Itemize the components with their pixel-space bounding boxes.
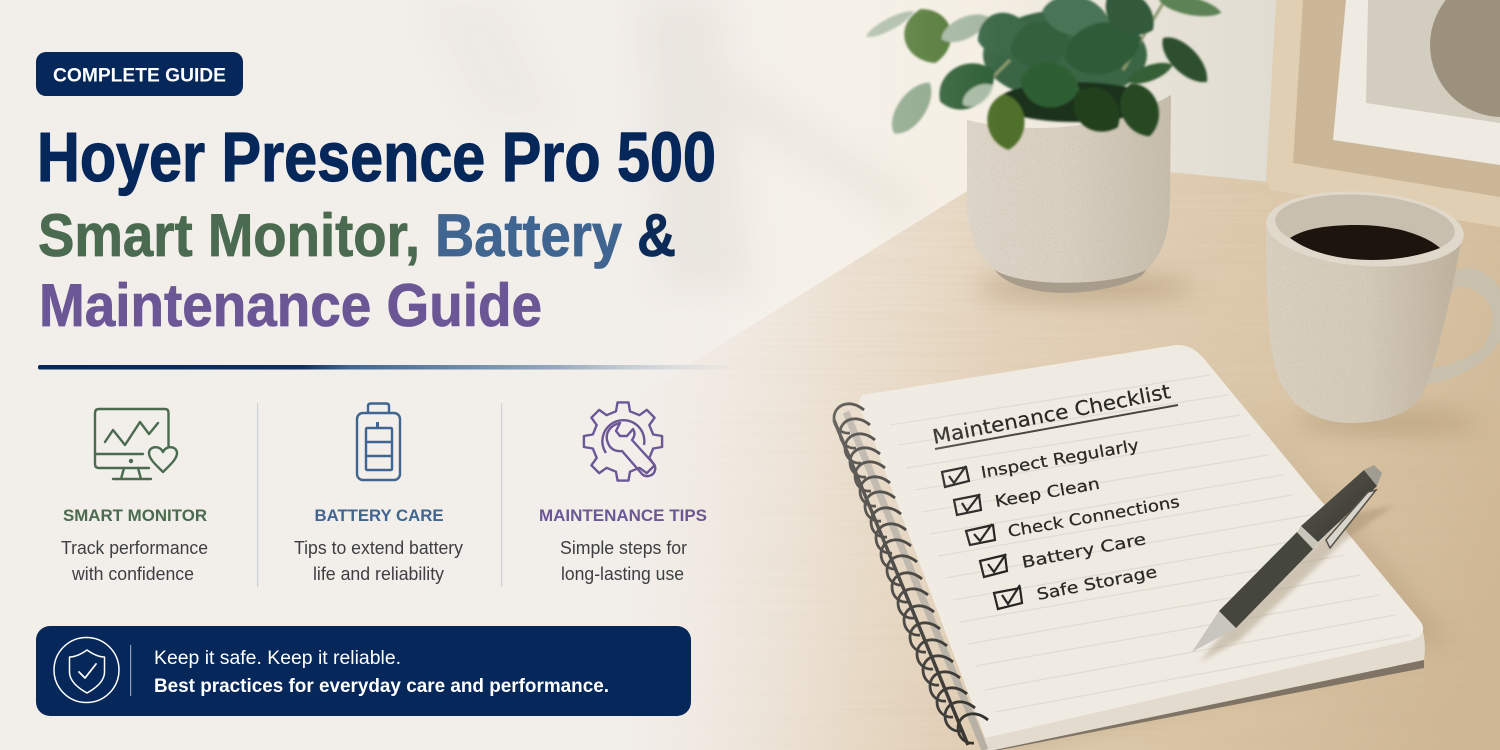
- title: Maintenance Guide: [39, 272, 542, 339]
- spiral binding: [834, 404, 988, 750]
- title: Battery: [435, 202, 623, 269]
- feature column: maintenance tips: [539, 402, 707, 584]
- icon: battery: [357, 404, 400, 480]
- feature column: smart monitor: Track performance: [61, 538, 208, 558]
- handwritten checklist: Check Connections: [1006, 492, 1181, 541]
- icon: gear with wrench: [584, 402, 662, 481]
- title: Smart Monitor,: [38, 202, 420, 269]
- feature column: smart monitor: with confidence: [71, 564, 194, 584]
- handwritten checklist: Battery Care: [1020, 529, 1147, 572]
- callout banner: Best practices for everyday care and performance.: [154, 676, 609, 697]
- coffee mug: [1262, 185, 1500, 425]
- shadows on desk: [975, 274, 1480, 750]
- feature column: battery care: [294, 404, 463, 584]
- feature column: smart monitor: SMART MONITOR: [63, 506, 207, 525]
- callout banner: [36, 626, 691, 716]
- handwritten checklist: Keep Clean: [993, 474, 1101, 511]
- handwritten checklist: [930, 379, 1181, 609]
- picture frame: [1266, 0, 1500, 227]
- icon: monitor with heart: [95, 409, 177, 479]
- handwritten checklist: Inspect Regularly: [979, 435, 1140, 482]
- badge: complete guide: COMPLETE GUIDE: [53, 66, 226, 86]
- feature column: battery care: BATTERY CARE: [314, 506, 444, 525]
- title: &: [637, 202, 676, 269]
- divider rule: [38, 365, 730, 370]
- plant pot: [967, 95, 1171, 293]
- column separator: [257, 403, 258, 587]
- title: Hoyer Presence Pro 500: [37, 118, 716, 196]
- badge: complete guide: [36, 52, 243, 96]
- callout banner: Keep it safe. Keep it reliable.: [154, 648, 401, 669]
- column separator: [501, 403, 502, 587]
- feature column: maintenance tips: MAINTENANCE TIPS: [539, 506, 707, 525]
- pen: [1192, 465, 1395, 662]
- feature column: smart monitor: [61, 409, 208, 584]
- handwritten checklist: Safe Storage: [1035, 562, 1159, 604]
- feature column: maintenance tips: Simple steps for: [560, 538, 687, 558]
- notebook: [834, 345, 1425, 750]
- feature column: maintenance tips: long-lasting use: [561, 564, 684, 584]
- ruled page lines: [890, 375, 1410, 712]
- handwritten checklist: Maintenance Checklist: [930, 379, 1173, 449]
- left cream fade panel: [0, 0, 1000, 750]
- plant leaves: [863, 0, 1223, 152]
- feature column: battery care: Tips to extend battery: [294, 538, 463, 558]
- desk surface: [600, 172, 1500, 750]
- title: [37, 118, 716, 339]
- window light shadows: [420, 0, 925, 290]
- feature column: battery care: life and reliability: [313, 564, 444, 584]
- icon: shield with check: [54, 638, 119, 702]
